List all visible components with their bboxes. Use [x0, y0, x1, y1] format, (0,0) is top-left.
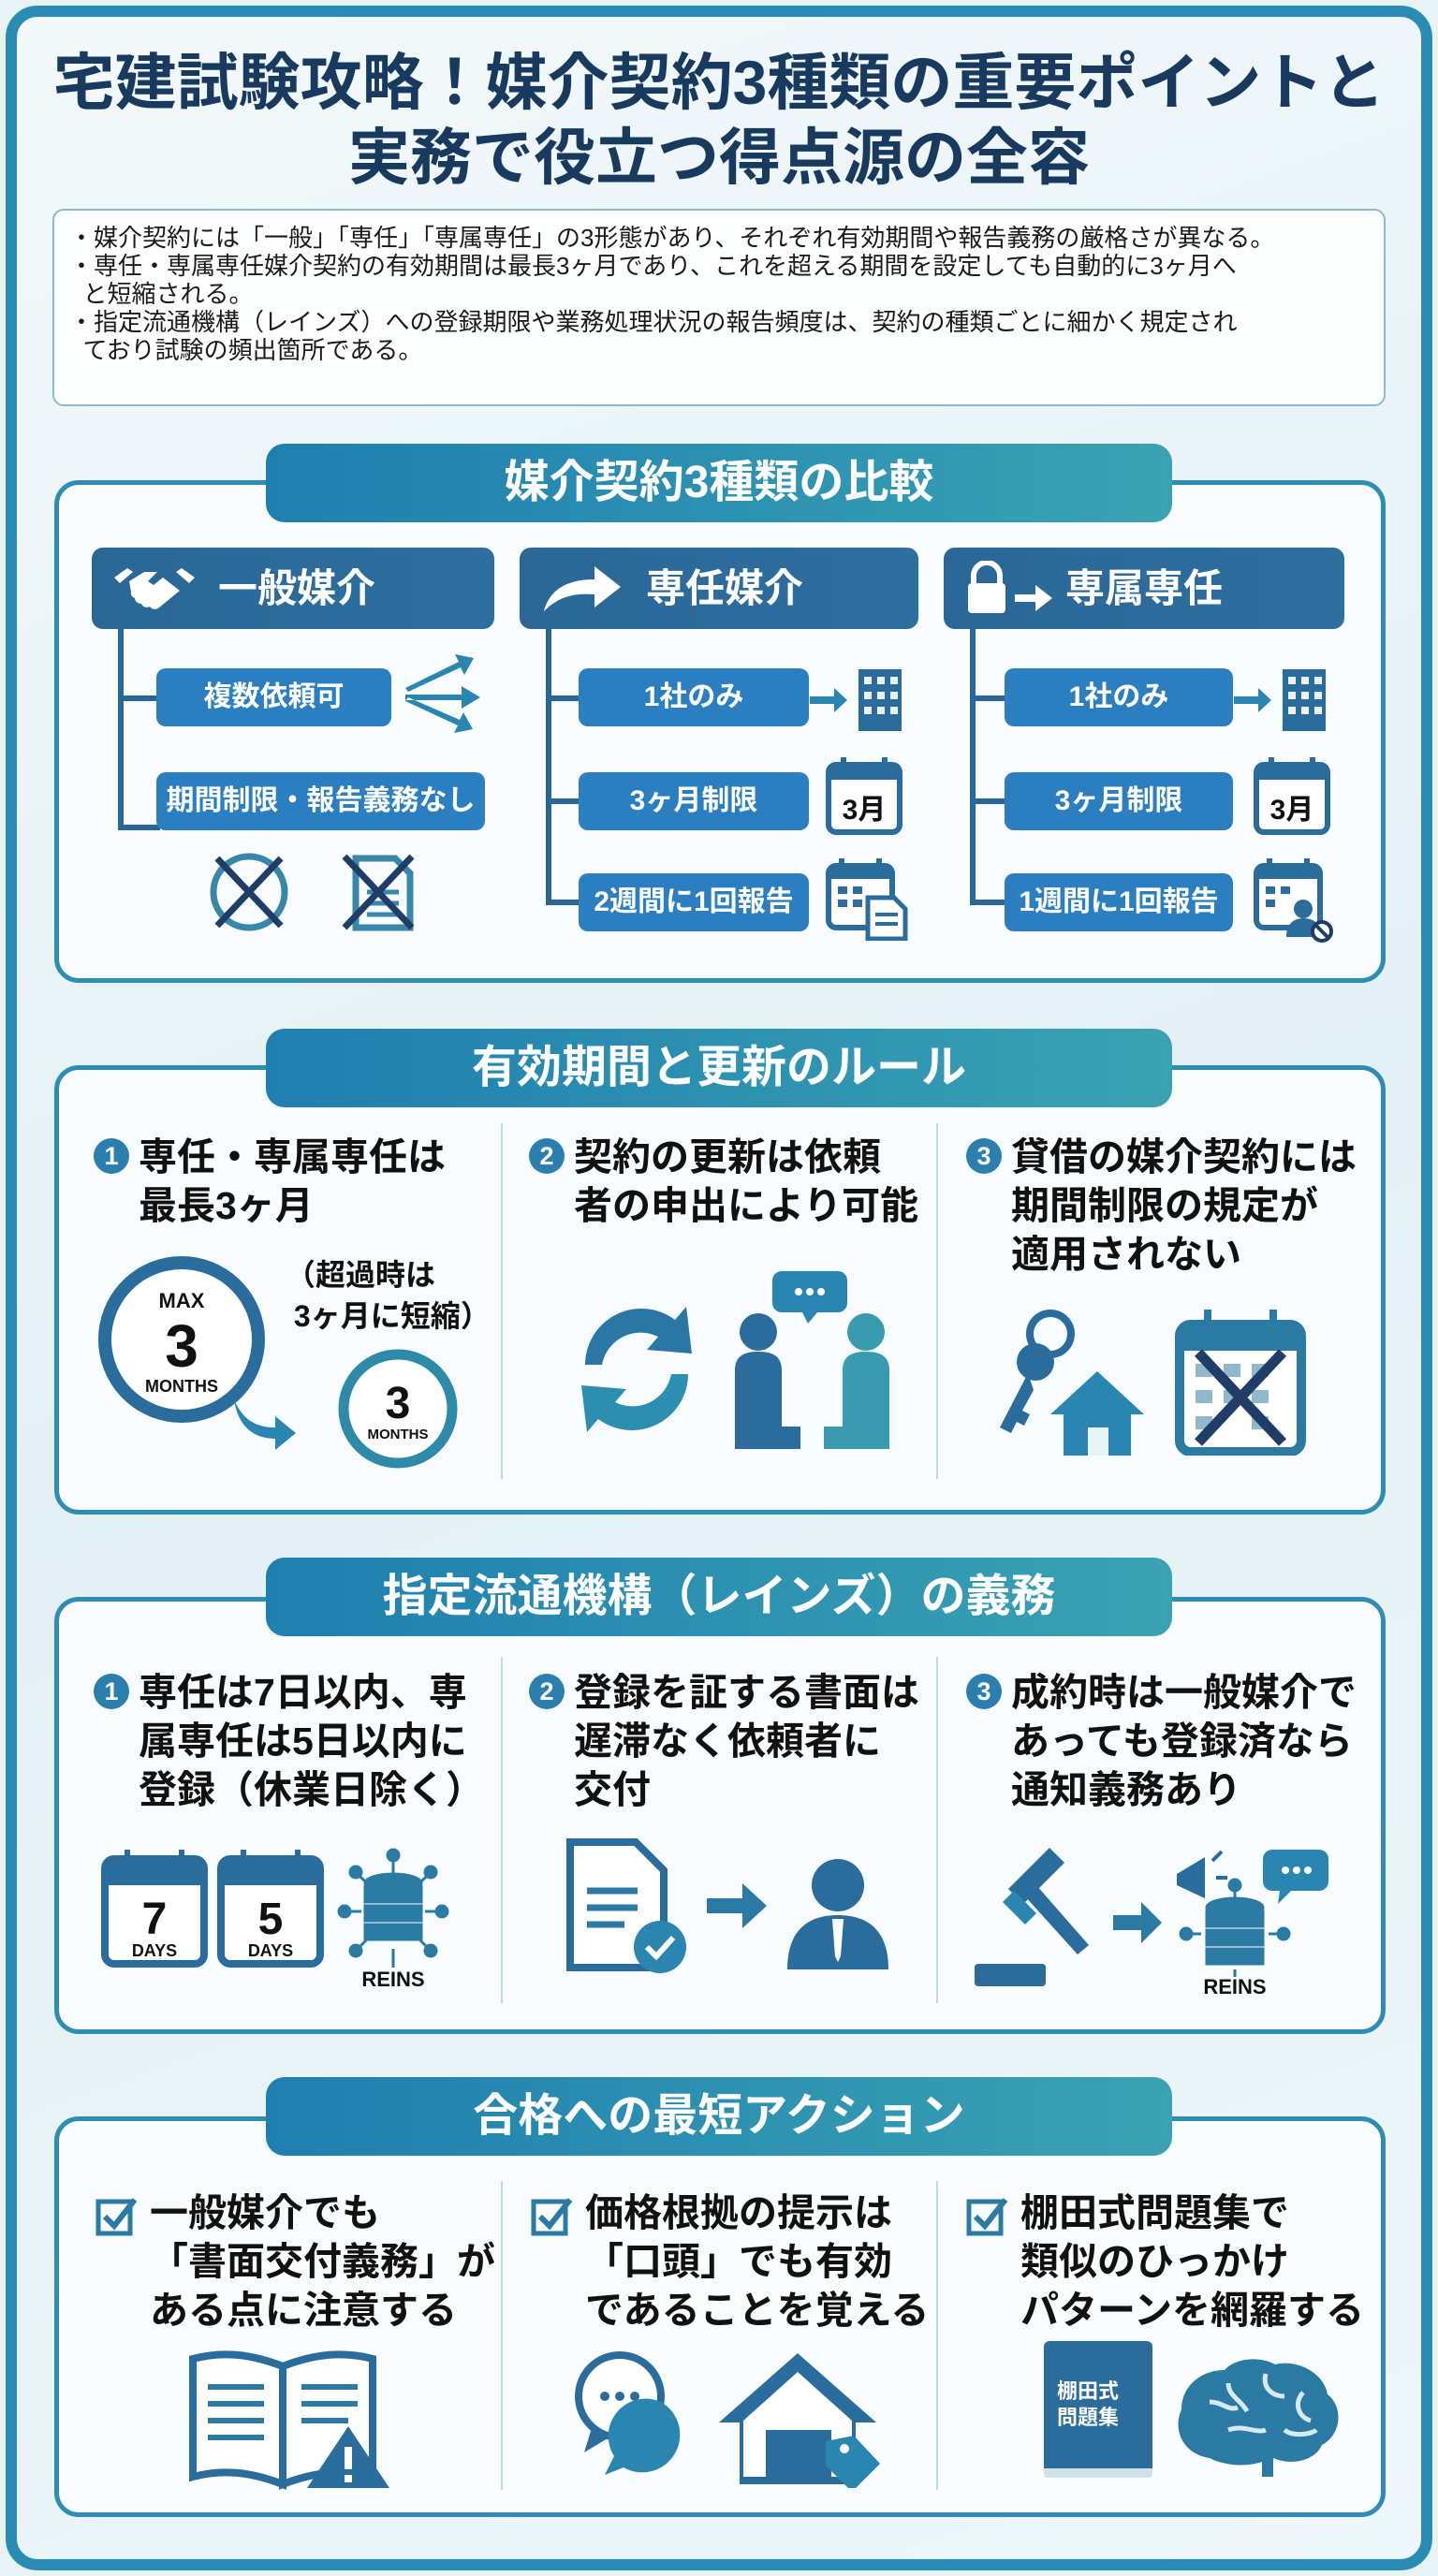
header 専任媒介: 専任媒介 [646, 566, 803, 610]
column: 専任媒介: 3月 [843, 795, 886, 826]
box 複数依頼可 [156, 668, 391, 726]
icon gavel → REINS [975, 1848, 1328, 1996]
action 3: パターンを網羅する [1020, 2289, 1364, 2332]
action 2 [532, 2191, 929, 2488]
icon book 棚田式問題集 & brain: 棚田式 [1057, 2379, 1119, 2403]
item 2: 者の申出により可能 [574, 1184, 918, 1227]
title [53, 48, 1385, 192]
heading: actions [266, 2077, 1172, 2156]
item 1: 1 [104, 1677, 119, 1705]
item 3: 適用されない [1011, 1233, 1241, 1276]
intro text block: ・指定流通機構（レインズ）への登録期限や業務処理状況の報告頻度は、契約の種類ごとに細かく規定され [69, 308, 1237, 336]
item 2: 交付 [574, 1768, 651, 1811]
intro text block: と短縮される。 [82, 280, 253, 308]
item 1: 専任・専属専任は [139, 1135, 446, 1178]
box 3ヶ月制限 [1005, 772, 1233, 830]
item 2: 2 [539, 1677, 554, 1705]
box 1社のみ: 1社のみ [644, 681, 743, 712]
action 1: 一般媒介でも [150, 2191, 380, 2234]
icon arrows [405, 654, 480, 733]
icon clocks: 3 [386, 1379, 410, 1428]
heading: validity rules [266, 1029, 1172, 1107]
item 3: 3 [976, 1142, 991, 1170]
icon calendars & REINS: 7 [142, 1895, 167, 1944]
item 3 [966, 1135, 1357, 1456]
panel: validity rules [54, 1065, 1386, 1515]
item 1 [94, 1671, 484, 1991]
heading: validity rules: 有効期間と更新のルール [472, 1043, 966, 1092]
column: 専任媒介 [520, 548, 918, 941]
icon clocks: MONTHS [145, 1377, 218, 1396]
box 2週間に1回報告 [579, 873, 809, 931]
header 一般媒介: 一般媒介 [218, 566, 375, 610]
intro text block: ・専任・専属専任媒介契約の有効期間は最長3ヶ月であり、これを超える期間を設定しても自動的に3ヶ月へ [69, 252, 1237, 280]
item 1: 1 [104, 1142, 119, 1170]
icon calendars & REINS [101, 1848, 449, 1991]
icon calendars & REINS: REINS [361, 1968, 425, 1991]
action 3 [966, 2191, 1364, 2478]
icon clocks: 3 [165, 1312, 198, 1380]
item 1 [94, 1135, 491, 1468]
column: 一般媒介 [92, 548, 494, 930]
heading: REINS [266, 1558, 1172, 1636]
box 3ヶ月制限: 3ヶ月制限 [1055, 785, 1182, 816]
icon key house & crossed calendar [1000, 1310, 1306, 1456]
item 1: 登録（休業日除く） [139, 1768, 484, 1811]
title: 宅建試験攻略！媒介契約3種類の重要ポイントと [53, 48, 1385, 117]
icon calendars & REINS: 5 [258, 1895, 283, 1944]
action 3: 類似のひっかけ [1020, 2240, 1289, 2283]
note: 3ヶ月に短縮） [294, 1299, 491, 1333]
item 3: 貸借の媒介契約には [1011, 1135, 1357, 1178]
heading: comparison [266, 444, 1172, 522]
header 専属専任 [944, 548, 1344, 629]
title: 実務で役立つ得点源の全容 [348, 123, 1090, 192]
action 3: 棚田式問題集で [1020, 2191, 1289, 2234]
column: 専属専任 [944, 548, 1344, 943]
header 専任媒介 [520, 548, 918, 629]
action 2: 価格根拠の提示は [585, 2191, 892, 2234]
icon refresh & handshake [581, 1271, 889, 1449]
box 1社のみ [579, 668, 809, 726]
item 2 [529, 1135, 918, 1449]
action 1: 「書面交付義務」が [150, 2240, 495, 2283]
item 2: 登録を証する書面は [574, 1671, 919, 1714]
icon calendars & REINS: DAYS [132, 1941, 177, 1960]
item 1: 最長3ヶ月 [139, 1184, 314, 1227]
item 3: あっても登録済なら [1011, 1720, 1353, 1763]
icon calendars & REINS: DAYS [248, 1941, 293, 1960]
box 期間制限・報告義務なし: 期間制限・報告義務なし [167, 785, 476, 816]
box 複数依頼可: 複数依頼可 [204, 681, 345, 712]
icon book warning [189, 2350, 389, 2490]
intro text block: ており試験の頻出箇所である。 [82, 336, 422, 364]
box 1社のみ: 1社のみ [1069, 681, 1168, 712]
panel: shortest actions [54, 2116, 1386, 2517]
item 3 [966, 1671, 1357, 1996]
item 2 [529, 1671, 919, 1973]
note [286, 1258, 491, 1333]
column: 専属専任: 3月 [1270, 795, 1313, 826]
heading: actions: 合格への最短アクション [473, 2091, 965, 2141]
intro text block: ・媒介契約には「一般」「専任」「専属専任」の3形態があり、それぞれ有効期間や報告義務の厳格さが異なる。 [69, 224, 1274, 252]
icon doc → person [566, 1838, 888, 1973]
icon chat & house tag [575, 2351, 880, 2488]
panel: REINS duties [54, 1597, 1386, 2034]
action 1 [95, 2191, 495, 2490]
box 1社のみ [1005, 668, 1233, 726]
box 3ヶ月制限 [579, 772, 809, 830]
item 2: 遅滞なく依頼者に [574, 1720, 881, 1763]
icon book 棚田式問題集 & brain: 問題集 [1057, 2406, 1119, 2429]
intro text block [52, 209, 1386, 406]
panel: comparison [54, 480, 1386, 983]
box 1週間に1回報告: 1週間に1回報告 [1019, 886, 1219, 917]
box 期間制限・報告義務なし [156, 772, 485, 830]
item 3: 通知義務あり [1011, 1768, 1241, 1811]
item 2: 契約の更新は依頼 [574, 1135, 881, 1178]
box 2週間に1回報告: 2週間に1回報告 [594, 886, 794, 917]
action 1: ある点に注意する [150, 2289, 457, 2332]
header 専属専任: 専属専任 [1065, 566, 1223, 610]
item 1: 専任は7日以内、専 [139, 1671, 467, 1714]
item 3: 成約時は一般媒介で [1011, 1671, 1357, 1714]
action 2: 「口頭」でも有効 [585, 2240, 892, 2283]
icon clocks [98, 1256, 457, 1468]
heading: comparison: 媒介契約3種類の比較 [505, 458, 933, 507]
note: （超過時は [286, 1258, 435, 1292]
icon book 棚田式問題集 & brain [1044, 2341, 1152, 2478]
action 2: であることを覚える [585, 2289, 929, 2332]
item 1: 属専任は5日以内に [139, 1720, 467, 1763]
header 一般媒介 [92, 548, 494, 629]
box 1週間に1回報告 [1005, 873, 1233, 931]
icon clocks: MONTHS [367, 1427, 429, 1442]
heading: REINS: 指定流通機構（レインズ）の義務 [382, 1572, 1056, 1621]
item 3: 3 [976, 1677, 991, 1705]
icon clocks: MAX [159, 1289, 205, 1312]
item 3: 期間制限の規定が [1011, 1184, 1318, 1227]
item 2: 2 [539, 1142, 554, 1170]
icon no clock / no doc [210, 854, 414, 930]
box 3ヶ月制限: 3ヶ月制限 [630, 785, 757, 816]
